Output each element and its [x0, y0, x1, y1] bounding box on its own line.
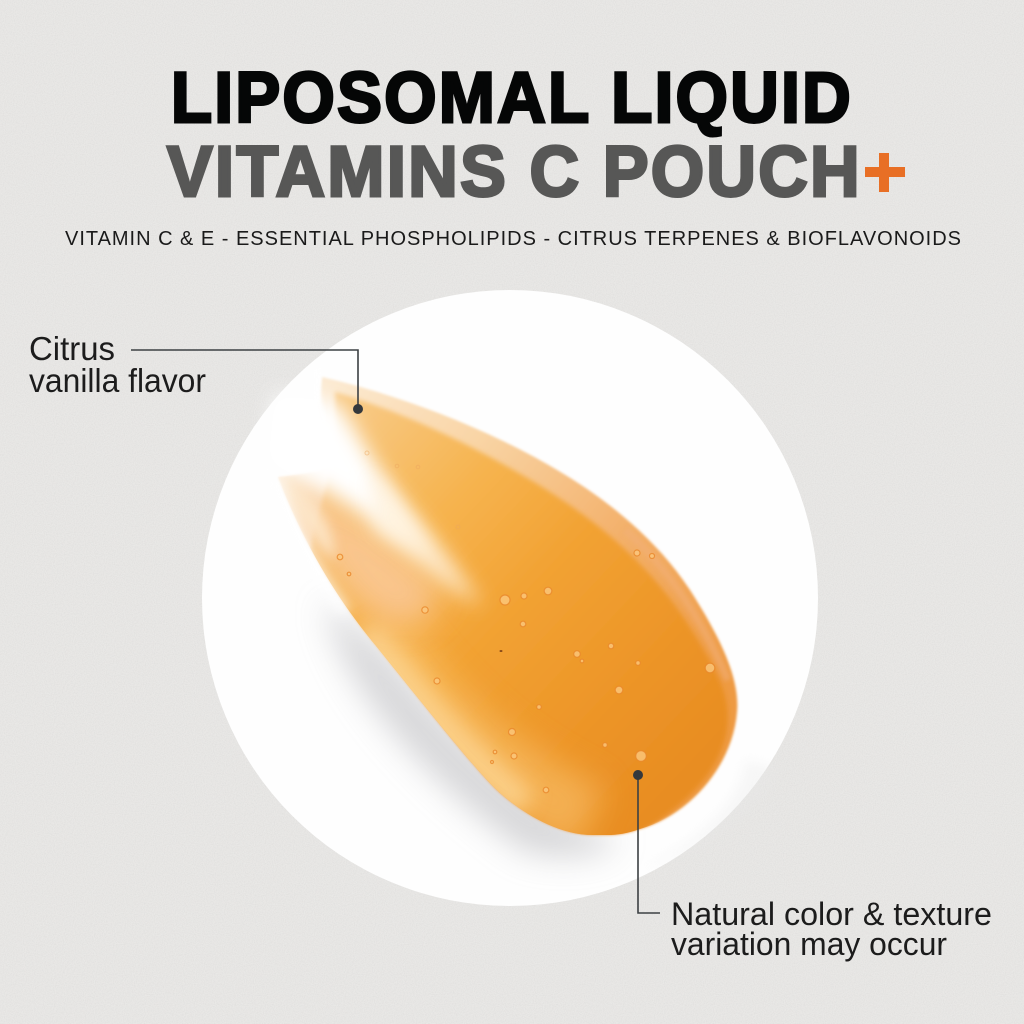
swatch body [278, 392, 728, 846]
left edge softening [276, 476, 345, 612]
callout: citrus vanilla flavor [29, 330, 363, 414]
leader line [131, 350, 358, 409]
left finger tip fade [290, 488, 340, 560]
broad lower glow [375, 640, 590, 820]
subtitle: VITAMIN C & E - ESSENTIAL PHOSPHOLIPIDS - CITRUS TERPENES & BIOFLAVONOIDS [65, 228, 961, 250]
callout: natural color and texture [633, 770, 992, 962]
lower edge highlight [365, 630, 525, 805]
label: variation may occur [671, 926, 947, 962]
notch cream streak [370, 470, 482, 606]
orange plus [865, 153, 905, 192]
label: Natural color & texture [671, 896, 992, 932]
leader dot [633, 770, 643, 780]
liquid swatch [268, 368, 737, 846]
top tip softening [315, 368, 324, 425]
drop shadow [325, 600, 780, 868]
right edge sheen [625, 530, 728, 680]
left finger tint [285, 480, 440, 624]
faint bubbles [365, 451, 460, 529]
label: vanilla flavor [29, 362, 206, 399]
heading line 1: LIPOSOMAL LIQUID [171, 59, 853, 138]
leader dot [353, 404, 363, 414]
leader line [638, 774, 660, 913]
heading line 2: VITAMINS C POUCH [167, 133, 862, 212]
swatch outer rim [278, 377, 737, 835]
bubbles [337, 550, 715, 793]
label: Citrus [29, 330, 115, 367]
speck [500, 650, 502, 652]
white circle [202, 290, 818, 906]
notch white fade [268, 395, 430, 555]
title [167, 59, 905, 212]
